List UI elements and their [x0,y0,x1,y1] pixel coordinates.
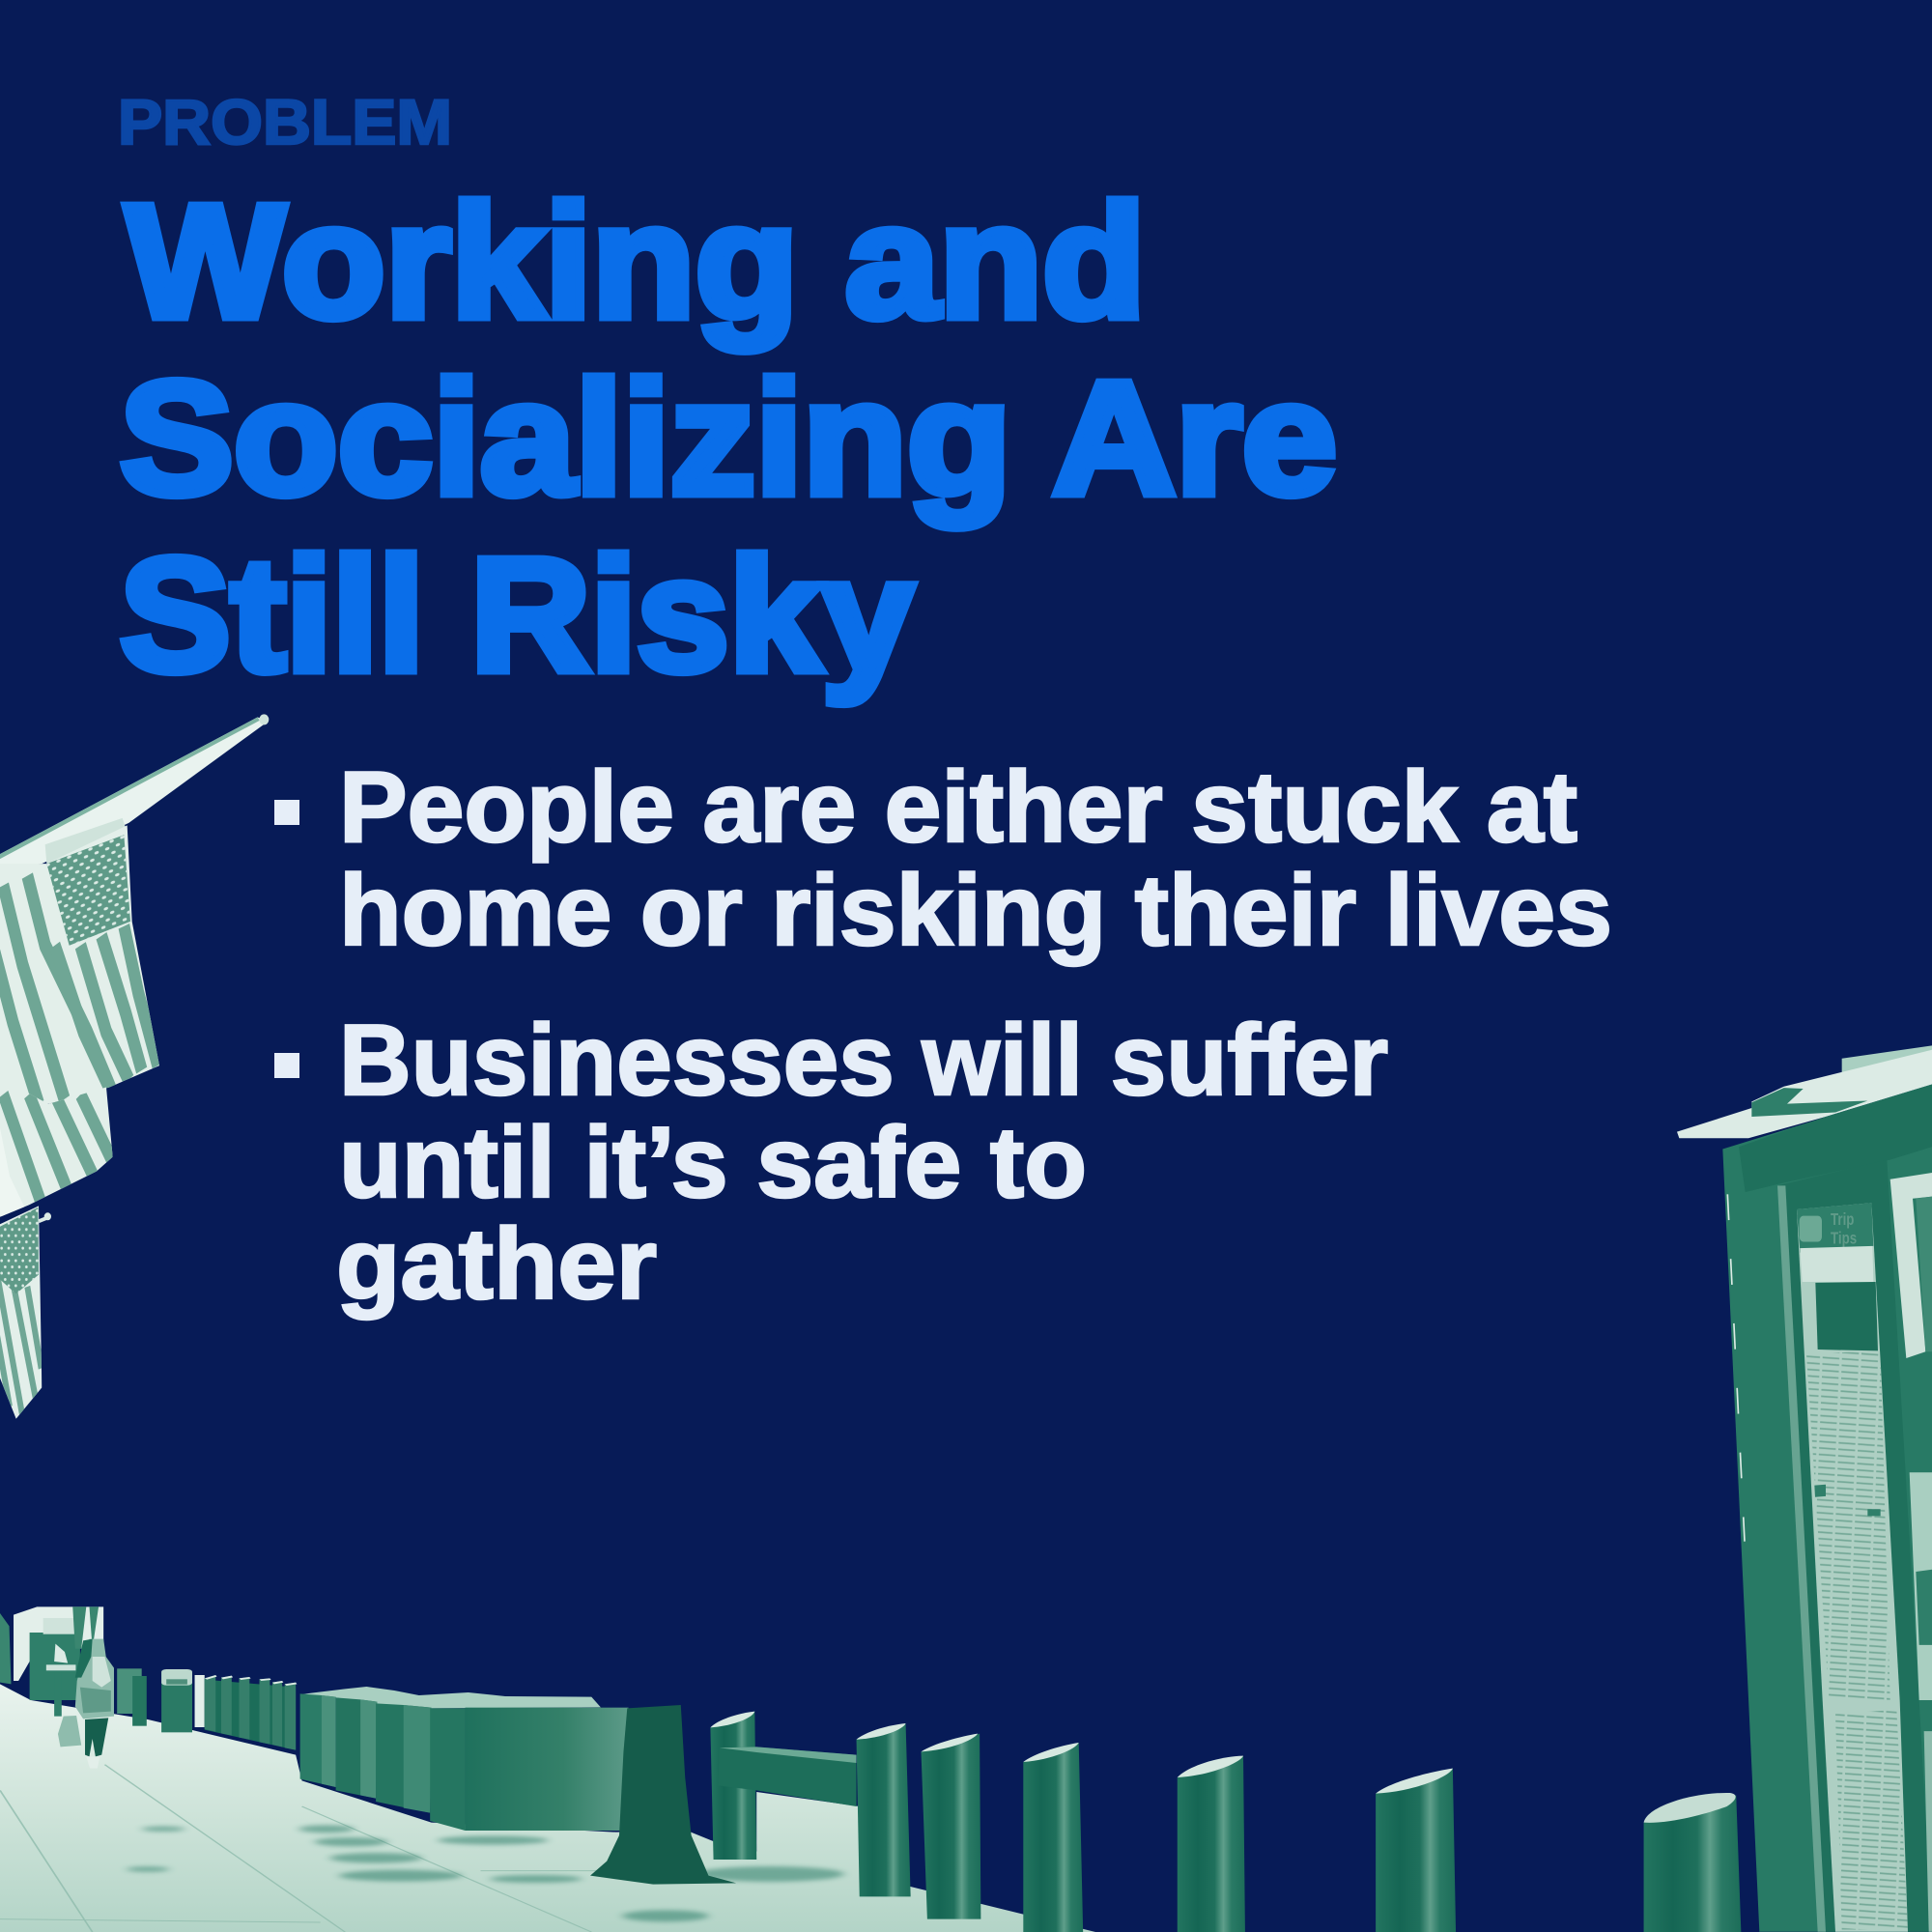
flags photo [0,714,269,1421]
label: problem: PROBLEM [118,86,452,157]
pedestrian [58,1639,114,1769]
bollard 5 [1178,1756,1245,1932]
bullet text 2 [336,1005,1388,1321]
flag pole [0,714,269,867]
bollard 7 [1644,1793,1741,1932]
title: Working and [126,172,1146,352]
title: Still Risky [120,526,914,705]
bullet text 2: gather [336,1208,657,1321]
bollards with rail [710,1712,980,1919]
sidewalk scene [0,1606,1095,1932]
bullet text 2: Businesses will suffer [339,1005,1388,1117]
flag 1 [0,825,159,1104]
roof [1677,1045,1932,1192]
shelter edge highlights [1727,1194,1745,1542]
bullet text 1: People are either stuck at [339,752,1577,864]
title: Socializing Are [120,349,1337,528]
info panel [1797,1203,1908,1932]
right bollards [1023,1743,1741,1932]
bus shelter [1677,1045,1932,1932]
bullet list [274,752,1612,1321]
bullet marker 1 [274,800,299,825]
sidewalk [0,1684,1095,1932]
bullet text 1: home or risking their lives [339,855,1612,967]
bullet text 1 [339,752,1612,967]
small pole finial [39,1212,51,1223]
distant trees and kiosk [0,1606,142,1717]
title [120,172,1337,705]
flag 3 [0,1206,43,1419]
inner frame [1777,1160,1932,1932]
flag 2 [0,1088,113,1217]
panel heading: Trip [1831,1210,1854,1230]
bollard row [205,1675,297,1750]
panel subheading: Tips [1831,1230,1857,1248]
bollard 4 [1023,1743,1083,1932]
bollard and bin [132,1669,205,1732]
planters [300,1693,629,1831]
bullet marker 2 [274,1053,299,1078]
shelter body [1722,1085,1932,1932]
bullet text 2: until it’s safe to [339,1107,1087,1219]
bollard 6 [1376,1769,1456,1932]
planter shrubs [302,1687,601,1708]
tree trunk [590,1705,736,1885]
